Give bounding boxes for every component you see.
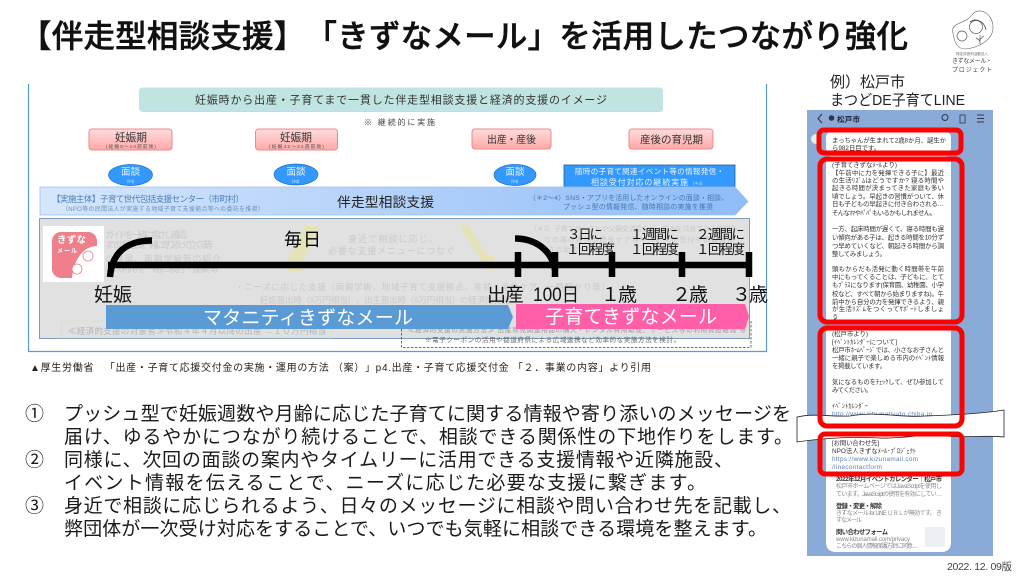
arrow: accompanying consultation [40,187,748,215]
curve: daily start [110,240,152,277]
interview ellipse 1: 面談 [121,166,140,178]
bubble: kizuna mail message: 頭もからだも活発に動く時間帯を午前 [832,264,945,273]
text block: point 3: ③ [25,495,44,517]
stage: pregnancy 32-34 weeks [256,129,338,150]
panel: grey faded support details: ガイドを一緒に指さし確認。 [105,229,193,240]
bubble: contact message: [お問い合わせ先] [832,438,879,447]
card: link previews: ています。JavaScriptの使用を有効にしてい… [836,490,942,498]
source caption: ▲厚生労働省 「出産・子育て応援交付金の実施・運用の方法 （案）」p4.出産・子育て応援交付金 「２．事業の内容」より引用 [30,361,651,374]
red highlight: child age message [819,130,961,153]
bubble: kizuna mail message: 中にもってくることは、子どもに、とて [832,272,944,281]
red highlight: kizuna mail message [820,159,962,322]
interview ellipse 1 [108,164,152,186]
bubble: Matsudo city message: 松戸市ﾎｰﾑﾍﾟｰｼﾞでは、小さなお子さんと [832,345,944,354]
panel: grey faded support details: までの見通しを一緒に寄り添って立てる 等 [105,239,213,250]
label: every two weeks [696,227,745,257]
bubble: Matsudo city message: http://www.city.matsudo.chiba.jp [832,411,932,418]
bubble: child age message: まっちゃんが生まれて2歳8か月、誕生か [832,136,947,144]
bubble: child age message: ら982日目です。 [832,144,880,152]
stage: birth and postpartum: 出産・産後 [487,133,536,146]
icon: organisation logo [952,11,993,74]
heading: diagram banner: 妊娠時から出産・子育てまで一貫した伴走型相談支援と経済的支援のイメージ [195,92,607,106]
stage: birth and postpartum [472,129,551,149]
card: link previews: www.kizunamail.com/privacy [835,537,910,543]
heading: diagram banner [140,88,663,112]
bubble: kizuna mail message: の生活ﾘｽﾞﾑはどうですか? 寝る時間や [832,176,944,184]
curve: 100 days [515,238,555,270]
box: ongoing information [564,165,735,187]
age label: 3 years: ３歳 [732,284,768,306]
bubble: kizuna mail message: そんなﾏﾏやﾊﾟﾊﾟもいるかもしれません。 [832,209,936,217]
arrow: accompanying consultation: （＊2～4）SNS・アプリを活用したオンラインの面談・相談、 [529,193,728,202]
bubble: kizuna mail message: もﾌﾟﾗｽになります(保育園、幼稚園、小学 [832,280,945,289]
torn paper band [797,410,1004,442]
heading: example Matsudo city: まつどDE子育てLINE [830,92,965,109]
bubble: Matsudo city message: (松戸市より) [832,329,868,338]
label: every week: １回程度 [630,242,679,257]
text block: point 1 [25,403,793,448]
bubble: kizuna mail message: 一方、起床時間が遅くて、寝る時間も遅 [832,224,945,233]
panel: grey faded support details: りの場の提供や産後ケア等サービスの受付や情報提供 [544,235,734,244]
screenshot header: 松戸市 [837,114,860,124]
bubble: contact message: NPO法人きずなﾒｰﾙ･ﾌﾟﾛｼﾞｪｸﾄ [832,446,916,455]
bubble: contact message [826,436,951,476]
age label: pregnancy: 妊娠 [94,284,132,306]
stage: postnatal childcare [629,129,713,149]
box: ongoing information: 随時の子育て関連イベント等の情報発信・ [575,166,724,176]
bubble: Matsudo city message: を掲載しています。 [832,361,886,370]
bubble: Matsudo city message: 一緒に親子で楽しめる市内のｲﾍﾞﾝﾄ情報 [832,353,945,362]
arrow: maternity kizuna mail [106,305,513,329]
box: economic support method [402,321,751,348]
bubble: kizuna mail message: う。 [832,313,840,321]
bubble: contact message: /linecontactform [832,464,882,471]
age label: 1 year: １歳 [601,284,637,306]
stage: pregnancy 8-10 weeks: (妊娠8～10週前後) [106,143,156,150]
card: link previews: 松戸市ホームページではJavaScriptを使用し [836,482,942,490]
bubble: kizuna mail message: 校など、すべて朝から始まりますね)。午 [832,289,945,298]
arrow: accompanying consultation: 伴走型相談支援 [337,195,434,210]
stage: pregnancy 8-10 weeks [89,129,172,150]
bubble: Matsudo city message: みてください。 [832,386,872,394]
timeline [108,238,750,277]
card: link previews: 問い合わせフォーム [836,527,888,536]
label: every two weeks: ２週間に [696,227,745,242]
box: economic support method: ※電子クーポンの活用や都道府県による広域連携など効率的な実施方法を検討。 [425,335,680,344]
text block: point 2: ② [25,449,44,471]
text block: point 3 [25,495,791,540]
arrow: childcare kizuna mail: 子育てきずなメール [545,306,717,328]
card: link previews: きずなメール for LINE ＵＲＬが無効です。 き [836,509,942,517]
arrow: accompanying consultation: （NPO等の民間法人が実施する地域子育て支援拠点等への委託を推奨） [62,205,264,213]
text block: point 1: プッシュ型で妊娠週数や月齢に応じた子育てに関する情報や寄り添いのメッセージを [64,403,791,425]
panel: grey faded support details: 必要な支援メニューにつなぐ [328,245,455,256]
bubble: kizuna mail message: が生活ﾘｽﾞﾑをつくってｻﾎﾟｰﾄしましょ [832,304,944,313]
bubble: kizuna mail message: (子育てきずなﾒｰﾙより) [832,160,897,169]
interview ellipse 3 [494,164,536,186]
stage: pregnancy 32-34 weeks: (妊娠32～34週前後) [269,143,324,150]
screenshot header [818,114,984,124]
label: every week: １週間に [630,227,679,242]
label: every week [630,227,679,257]
panel: grey faded support details: きの助言 [548,245,578,254]
heading: example Matsudo city [830,74,965,109]
text block: point 1: ① [25,403,44,425]
arrow: accompanying consultation: 【実施主体】子育て世代包括支援センター（市町村） [52,194,244,204]
interview ellipse 2 [274,164,318,185]
bubble: kizuna mail message: い傾向がある子は、起きる時間を10分ず [832,232,944,242]
panel: LINE screenshot [807,110,993,556]
bubble: Matsudo city message: 気になるものをﾁｪｯｸして、ぜひ参加して [832,377,944,386]
text block: point 3: 身近で相談に応じられるよう、日々のメッセージに相談や問い合わせ先を記載し、 [64,495,791,517]
text block: point 3: 弊団体が一次受け対応をすることで、いつでも気軽に相談できる環境を整えます。 [64,518,767,540]
icon: kizuna mail app: メール [57,248,77,255]
label: every two weeks: １回程度 [696,242,745,257]
panel: government diagram frame [28,84,766,352]
bubble: Matsudo city message: [ｲﾍﾞﾝﾄｶﾚﾝﾀﾞｰについて] [832,338,897,346]
interview ellipse 1: （＊1） [124,179,137,184]
box: ongoing information: （＊4） [690,181,705,186]
arrow: accompanying consultation: プッシュ型の情報発信、随時相談の実施を推奨 [563,202,713,211]
panel: grey faded support details: の推奨、両親学級等の紹介 [105,253,221,264]
text block: point 2 [25,449,733,494]
bubble: kizuna mail message: 整してみましょう。 [832,249,886,258]
stage: pregnancy 32-34 weeks: 妊娠期 [280,131,312,144]
arrow: maternity kizuna mail: マタニティきずなメール [203,307,413,329]
card: link previews: ずなメール [836,516,862,524]
interview ellipse 2: （＊2） [289,179,302,184]
box: economic support method: ≪経済的支援の実施方法≫ 出産育児関連用品の購入・レンタル費用助成、サービス等の利用負担軽減 等 [408,325,746,334]
box: economic support recipients: ≪経済的支援の対象者≫令和４年４月以降の出産 →１０万円相当 [68,326,326,336]
bubble: kizuna mail message: つ早めていくなど、朝起きる時間から調 [832,242,944,250]
title: 【伴走型相談支援】「きずなメール」を活用したつながり強化 [20,18,908,54]
age label: 2 years: ２歳 [672,284,708,306]
heading: example Matsudo city: 例）松戸市 [830,74,905,91]
icon: kizuna mail app [43,226,104,282]
age label: birth: 出産 [487,284,524,306]
age label: 100 days: 100日 [533,285,579,306]
stage: pregnancy 8-10 weeks: 妊娠期 [115,131,147,144]
bubble: Matsudo city message [826,326,951,438]
label: daily: 毎日 [284,230,321,250]
text block: point 1: 届け、ゆるやかにつながり続けることで、相談できる関係性の下地作りをします。 [64,426,793,448]
label: every three days: １回程度 [566,242,615,257]
box: ongoing information: 相談受付対応の継続実施 [591,177,688,187]
icon: organisation logo: 特定非営利活動法人 [956,51,988,56]
panel: grey faded support details [40,218,750,338]
bubble: Matsudo city message: ｲﾍﾞﾝﾄｶﾚﾝﾀﾞｰ [832,402,868,410]
bubble: kizuna mail message: 【午前中に力を発揮できる子に】最近 [832,168,945,177]
stage: postnatal childcare: 産後の育児期 [640,133,703,146]
interview ellipse 3: （＊3） [508,179,521,184]
label: every three days [566,227,615,257]
text block: point 2: イベント情報を伝えることで、ニーズに応じた必要な支援に繋ぎます。 [64,472,706,494]
bubble: kizuna mail message: 前中から自分の力を発揮できるよう、親 [832,297,945,306]
bubble: contact message: https://www.kizunamail.com [832,456,918,463]
icon: organisation logo: プロジェクト [952,67,992,74]
card: link previews: 2022年12月イベントカレンダー｜松戸市 [836,474,943,483]
card: link previews [826,474,951,552]
bubble: child age message [811,132,951,153]
card: link previews: 登録・変更・解除 [836,501,883,510]
icon: kizuna mail app: きずな [57,234,86,246]
note: continuous implementation: ※ 継続的に実施 [364,117,435,127]
icon: organisation logo: きずなメール・ [952,57,992,65]
box: economic support recipients [62,321,332,338]
bubble: kizuna mail message [826,156,951,322]
panel: grey faded support details: ビス利用を一緒に検討・提案 等 [105,263,219,274]
arrow: childcare kizuna mail [516,304,749,329]
red highlight: Matsudo city message [820,328,962,426]
interview ellipse 3: 面談 [506,166,525,178]
interview ellipse 2: 面談 [286,166,306,178]
label: every three days: ３日に [567,227,603,242]
card: link previews: こちらの個人情報保護方針に同意… [836,542,918,550]
bubble: kizuna mail message: 日も子どもの早起きに付き合わされる… [832,199,944,208]
panel: grey faded support details: ・ニーズに応じた支援（両親学級、地域子育て支援拠点、産前・産後ケア、一時預かり等） [235,282,610,292]
red highlight: contact message [820,434,962,474]
bubble: kizuna mail message: 頃でしょう。早起きの習慣がついて、休 [832,192,945,200]
panel: grey faded support details: 妊娠届出時（5万円相当）、出生届出時（5万円相当）の経済的支援 [260,295,510,305]
version date: 2022. 12. 09版 [947,560,1012,573]
panel: grey faded support details: 身近で相談に応じ、 [348,233,438,244]
bubble: kizuna mail message: 起きる時間が決まってきた家庭も多い [832,183,944,192]
panel: grey faded support details: （＊3）子育てサークルや父親交流会など、悩みを共有できる仲間作 [530,224,737,233]
text block: point 2: 同様に、次回の面談の案内やタイムリーに活用できる支援情報や近隣施設、 [64,449,733,471]
